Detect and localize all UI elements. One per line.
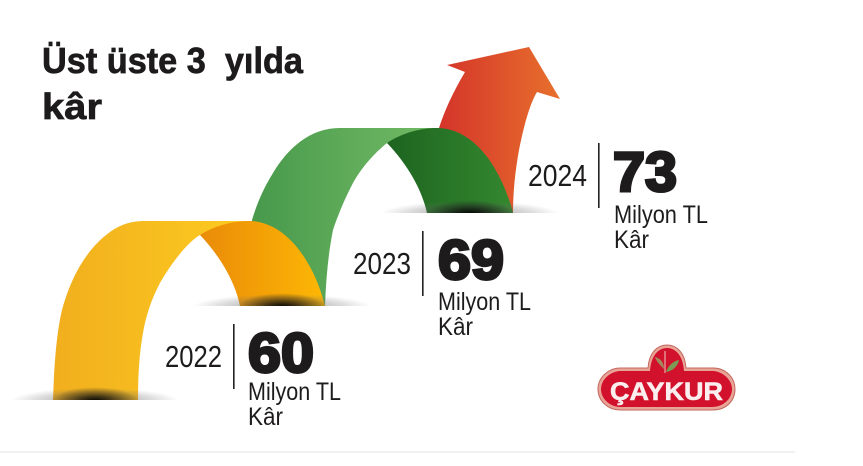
arch: green 2023	[252, 128, 560, 306]
label: Milyon TL	[248, 378, 341, 406]
green arch dark band	[387, 128, 513, 213]
stat: 2022	[165, 321, 341, 431]
green arch shadow	[388, 201, 552, 213]
value 73: 73	[613, 140, 677, 203]
stat: 2023	[353, 228, 531, 341]
label: Milyon TL	[614, 201, 708, 229]
value 60: 60	[248, 321, 314, 384]
arch: yellow 2022	[18, 221, 364, 400]
stat: 2023: Kâr	[438, 313, 473, 341]
year 2023: 2023	[353, 246, 411, 281]
stat: 2022: Kâr	[248, 403, 283, 431]
arrow: red rising arrow 2024	[437, 47, 560, 213]
leaf icon	[655, 351, 679, 373]
year 2022: 2022	[165, 339, 222, 374]
yellow arch light band	[53, 221, 252, 400]
green arch light band	[252, 128, 437, 306]
title: Üst üste 3 yılda	[42, 40, 304, 81]
logo wordmark: ÇAYKUR	[610, 378, 723, 406]
stat: 2024	[528, 140, 708, 254]
yellow arch dark band	[200, 221, 325, 306]
year 2024: 2024	[528, 158, 587, 193]
logo: ÇAYKUR	[598, 345, 735, 410]
title	[42, 40, 304, 127]
stat: 2024: Kâr	[614, 226, 649, 254]
label: Milyon TL	[438, 288, 531, 316]
title: kâr	[42, 86, 102, 127]
yellow arch foot shadow	[18, 388, 172, 400]
value 69: 69	[438, 228, 504, 291]
yellow arch upper shadow	[200, 294, 364, 306]
